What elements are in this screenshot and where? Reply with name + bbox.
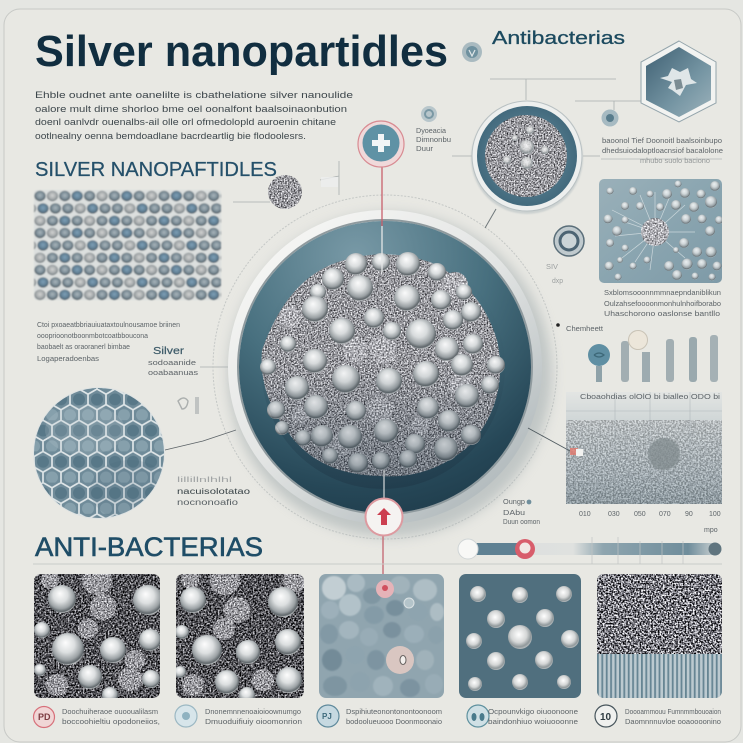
- axis labels: mpo: [704, 527, 718, 534]
- text block: small note: DAbu: [503, 510, 525, 517]
- connector: plus badge line: [381, 165, 383, 272]
- caption 2: Dnonemnnenoaioioownumgo: [205, 709, 301, 716]
- caption 4: Ocpounvkigo oiuoonoone: [488, 709, 578, 716]
- text block: grid caption: [37, 322, 180, 363]
- panel: pebble grid of nanoparticles: [34, 190, 221, 300]
- icon: small swirl: [421, 106, 437, 122]
- caption 3: Dspihiuteonontonontoonoom: [346, 709, 442, 716]
- axis labels: 100: [709, 511, 721, 518]
- text block: small note: Duun oomon: [503, 519, 540, 526]
- text block: honeycomb caption: [177, 477, 251, 507]
- pink target cell: [376, 580, 394, 598]
- panel: card 4 spaced spheres: [459, 574, 581, 698]
- connector: dish to chart with tag: [528, 428, 583, 456]
- text block: intro: ootlnealny oenna bemdoadlane bacrdeartlig bie flodoolesrs.: [35, 131, 306, 141]
- text block: right top: dhedsuiodaloptloacnsiof bacalolone: [602, 148, 723, 155]
- beige circle: [628, 330, 648, 350]
- axis labels: 070: [659, 511, 671, 518]
- text block: scatter caption: [604, 290, 721, 318]
- caption 2: [175, 705, 302, 727]
- caption 5: [595, 705, 721, 727]
- text block: swirl note: [416, 128, 451, 153]
- panel: scattered nanoparticles: [599, 179, 723, 283]
- text block: grid caption: Ctoi pxoaeatbbriauiuataxtoulnousamoe briinen: [37, 322, 180, 329]
- caption 5: Doooarnmouu Fumnmmbouoaion: [625, 709, 721, 716]
- panel: card 5 speckle and stripes: [597, 574, 722, 698]
- white knob: [458, 539, 478, 559]
- icon: plus badge: [358, 121, 404, 167]
- text block: faint note: SIV: [546, 264, 558, 271]
- dark blob: [648, 438, 680, 470]
- text block: scatter caption: Uhaschorono oaslonse bantllo: [604, 311, 720, 318]
- legend label: chemistry: [556, 323, 603, 333]
- text block: intro: oalore mult dime shorloo bme oel oonalfont baalsoinaonbution: [35, 104, 347, 114]
- axis labels: [579, 511, 721, 534]
- axis labels: 90: [685, 511, 693, 518]
- label: silver: sodoaanide: [148, 360, 196, 367]
- caption 3: bodoolueuooo Doonmoonaio: [346, 719, 442, 726]
- divider line under heading: [33, 563, 722, 565]
- caption 5: 10: [600, 712, 612, 723]
- caption 1: [34, 706, 160, 728]
- heading: antibacterias: Antibacterias: [492, 27, 625, 48]
- grainy core: [262, 254, 500, 476]
- caption 3: PJ: [322, 712, 332, 721]
- scattered spheres: [604, 180, 723, 280]
- connector lines: top right: [452, 79, 642, 156]
- dish interior: [239, 221, 531, 513]
- pale cell: [386, 646, 414, 674]
- icon: arrow badge: [366, 498, 402, 536]
- axis labels: 030: [608, 511, 620, 518]
- red knob: [515, 539, 535, 559]
- silver nanoparticle cluster: [260, 245, 505, 489]
- text block: honeycomb caption: nocnonoafio: [177, 498, 239, 507]
- text block: small note: Oungp: [503, 499, 525, 506]
- icon row with captions: [34, 705, 721, 728]
- text block: honeycomb caption: nacuisolotatao: [177, 487, 251, 496]
- caption 3: [317, 705, 442, 727]
- caption 4: [467, 705, 578, 727]
- title: Silver nanopartidles: [35, 27, 448, 76]
- text block: scatter caption: Sxblomsooonnmmnaepndaniblikun: [604, 290, 721, 297]
- caption 5: Daomnnnuvloe ooaoooonino: [625, 719, 721, 726]
- chart legend bars: [588, 330, 718, 382]
- panel: card 1 silver spheres: [34, 574, 160, 698]
- small ring cell: [404, 598, 414, 608]
- outer dashed ring: [213, 195, 557, 539]
- text block: faint note: [546, 264, 563, 285]
- burst core: [641, 218, 669, 246]
- text block: right top: baoonol Tief Doonoitl baalsoinbupo: [602, 138, 722, 145]
- caption 1: boccoohieltiu opodoneiios,: [62, 719, 160, 726]
- panel: card 2 silver spheres: [176, 574, 304, 698]
- chart: speckled distribution: [566, 392, 722, 534]
- central dish: [228, 210, 552, 537]
- heading: anti-bacterias: ANTI-BACTERIAS: [35, 532, 263, 562]
- diagram marker: [320, 161, 339, 195]
- fuzzy spheres: [279, 272, 472, 456]
- connector: arrow badge lines: [383, 470, 384, 585]
- text block: grid caption: oooprioonotboonmbotcoatbboucona: [37, 333, 148, 340]
- icon: glyph marks: [178, 397, 199, 414]
- icon: hexagon: [641, 41, 716, 122]
- text block: swirl note: Dimnonbu: [416, 137, 451, 144]
- heading: silver nanoparticles: SILVER NANOPAFTIDLES: [35, 158, 277, 181]
- label: silver: ooabaanuas: [148, 370, 199, 377]
- icon: small silver sphere: [233, 175, 302, 209]
- text block: swirl note: Dyoeacia: [416, 128, 446, 135]
- text block: grid caption: Logaperadoenbas: [37, 356, 100, 363]
- chart gridlines: [566, 392, 722, 504]
- panel: card 3 bacteria cells: [319, 574, 444, 698]
- panel: honeycomb sphere: [33, 387, 165, 519]
- caption 1: PD: [38, 712, 51, 722]
- text block: right top: [601, 138, 723, 165]
- caption 1: Doochuiheraoe ouooualilasm: [62, 709, 158, 716]
- text block: small note: [503, 499, 540, 526]
- text block: faint note: dxp: [552, 278, 563, 285]
- chart header: Cboaohdias olOlO bi bialleo ODO bi: [580, 394, 721, 401]
- text block: right top: mhubo suolo baciono: [640, 158, 710, 165]
- text block: honeycomb caption: lillillnlhlhl: [177, 477, 233, 484]
- tick mark: [485, 209, 496, 228]
- lower shading: [262, 369, 500, 489]
- dish ring: [228, 210, 542, 524]
- text block: intro: [35, 90, 353, 141]
- legend label: chemistry: Chemheett: [566, 326, 603, 333]
- caption 2: Dmuoduifiuiy oioomonrion: [205, 719, 302, 726]
- slider ticks: [592, 537, 683, 564]
- icon: title badge: [462, 42, 482, 62]
- icon: small sphere marker right: [602, 110, 618, 126]
- slider track: [468, 543, 718, 555]
- slider end: [708, 542, 722, 556]
- axis labels: 010: [579, 511, 591, 518]
- axis labels: 050: [634, 511, 646, 518]
- text block: grid caption: baobaelt as oraoranerl bimbae: [37, 344, 130, 351]
- burst rays: [612, 192, 695, 270]
- dish shadow: [228, 213, 552, 537]
- teal marker: [588, 344, 610, 366]
- icon: fuzzy sphere in dish: [471, 101, 583, 214]
- connector: honeycomb to dish: [165, 430, 236, 450]
- text block: scatter caption: Oulzahsefoooonmonhulnhoifborabo: [604, 301, 721, 308]
- label: silver: [148, 345, 245, 377]
- text block: swirl note: Duur: [416, 146, 434, 153]
- slider: [458, 537, 722, 564]
- text block: intro: doenl oanlvdr ouenalbs-ail olle orl ofmedolopld auroenin chitane: [35, 117, 336, 127]
- silver spheres: [260, 252, 505, 473]
- label: silver: Silver: [153, 345, 185, 357]
- text block: intro: Ehble oudnet ante oanelilte is cbathelatione silver nanoulide: [35, 90, 353, 100]
- icon: ring target: [554, 226, 584, 256]
- caption 4: baindonhiuo woiuooonne: [488, 719, 578, 726]
